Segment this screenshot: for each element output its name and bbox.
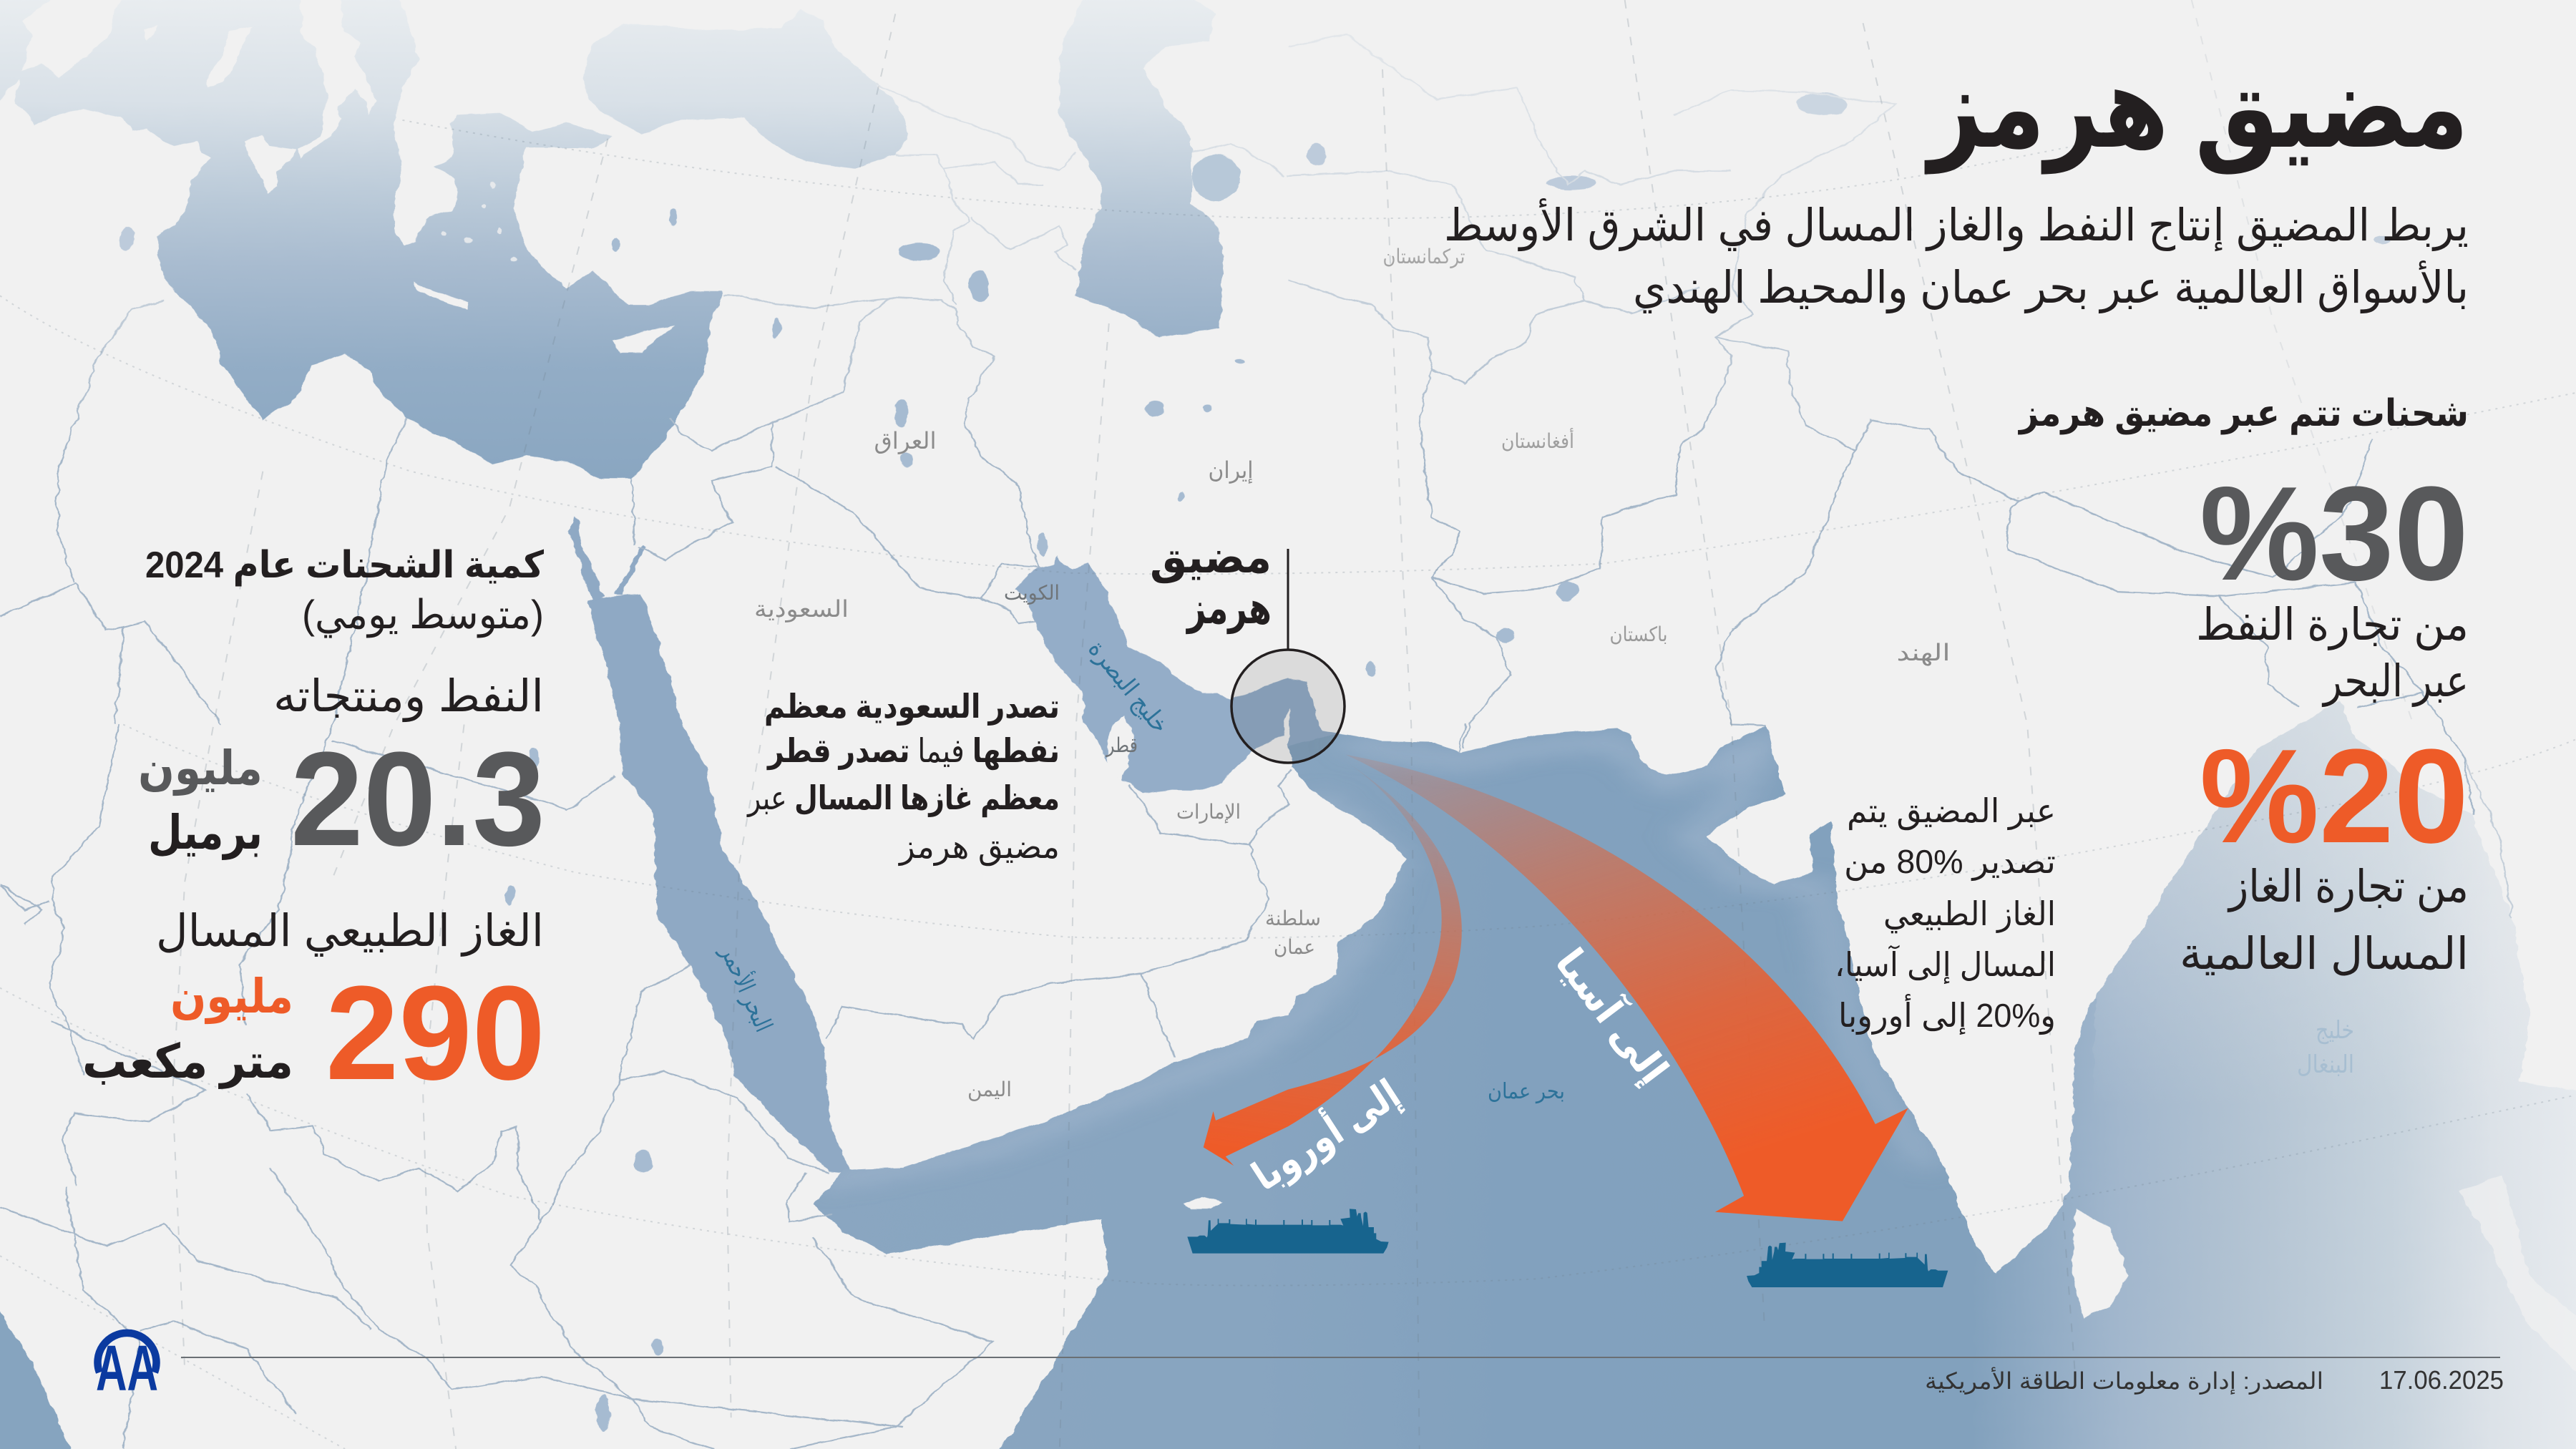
- oil value: برميل: [148, 806, 263, 860]
- sea labels: بحر عمان: [1488, 1080, 1565, 1103]
- source: المصدر: إدارة معلومات الطاقة الأمريكية: [1925, 1367, 2323, 1395]
- oil value: [138, 724, 545, 874]
- subtitle: بالأسواق العالمية عبر بحر عمان والمحيط الهندي: [1633, 260, 2469, 314]
- strait callout: مضيق: [1150, 533, 1272, 583]
- oil value: 20.3: [291, 724, 545, 874]
- sea labels: [714, 635, 2354, 1103]
- subtitle: يربط المضيق إنتاج النفط والغاز المسال في الشرق الأوسط: [1444, 197, 2469, 252]
- stat: LNG share: %20: [2200, 721, 2469, 871]
- country labels: الكويت: [1004, 582, 1060, 605]
- text block: LNG destinations: [1835, 792, 2056, 1035]
- country labels: الهند: [1896, 640, 1951, 666]
- arrow: to Europe: [1204, 761, 1462, 1166]
- icon: LNG tanker to Europe: [1187, 1209, 1389, 1254]
- oil value: مليون: [138, 741, 263, 796]
- heading: [145, 545, 545, 638]
- Indian Ocean west corner: [0, 1312, 82, 1449]
- country labels: اليمن: [967, 1078, 1012, 1101]
- heading: (متوسط يومي): [302, 592, 544, 638]
- country labels: قطر: [1105, 734, 1138, 757]
- title: مضيق هرمز: [1924, 45, 2469, 175]
- text block: LNG destinations: الغاز الطبيعي: [1883, 895, 2056, 934]
- country labels: باكستان: [1610, 623, 1667, 645]
- Black Sea: [583, 9, 907, 169]
- country labels: سلطنة: [1265, 907, 1321, 930]
- LNG value: 290: [326, 958, 545, 1108]
- country labels: عمان: [1274, 936, 1315, 958]
- LNG label: الغاز الطبيعي المسال: [156, 907, 544, 957]
- country labels: السعودية: [754, 596, 849, 623]
- country labels: الإمارات: [1176, 801, 1241, 824]
- Red Sea: [570, 517, 850, 1174]
- Sri Lanka: [2072, 1209, 2129, 1318]
- subtitle: [1444, 197, 2469, 314]
- text block: Saudi and Qatar exports: معظم غازها المسال عبر: [746, 779, 1060, 818]
- footer rule: [181, 1357, 2500, 1358]
- text block: LNG destinations: و%20 إلى أوروبا: [1838, 994, 2056, 1035]
- Mediterranean Sea: [0, 0, 723, 478]
- arrow: to Asia: [1345, 754, 1908, 1221]
- stat: oil share: %30: [2200, 459, 2469, 608]
- LNG value: [82, 958, 545, 1108]
- date: 17.06.2025: [2379, 1365, 2504, 1395]
- Qatar land: [1107, 716, 1133, 781]
- heading: شحنات تتم عبر مضيق هرمز: [2017, 393, 2469, 435]
- sea labels: خليج: [2316, 1017, 2354, 1044]
- country labels: تركمانستان: [1382, 245, 1465, 268]
- LNG value: مليون: [170, 970, 293, 1025]
- strait callout: [1150, 533, 1345, 763]
- heading: كمية الشحنات عام 2024: [145, 545, 545, 587]
- oil share caption: عبر البحر: [2321, 657, 2469, 707]
- LNG share caption: المسال العالمية: [2180, 930, 2469, 979]
- text block: Saudi and Qatar exports: [746, 688, 1060, 867]
- arrow label: to Asia: إلى آسيا: [1546, 939, 1679, 1093]
- Sumatra: [2459, 1176, 2576, 1423]
- icon: LNG tanker to Asia: [1747, 1243, 1948, 1287]
- text block: LNG destinations: تصدير %80 من: [1844, 843, 2056, 882]
- text block: Saudi and Qatar exports: تصدر السعودية معظم: [764, 688, 1060, 726]
- sea labels: البنغال: [2297, 1051, 2354, 1078]
- country labels: العراق: [874, 428, 936, 454]
- text block: LNG destinations: عبر المضيق يتم: [1847, 792, 2056, 831]
- text block: Saudi and Qatar exports: مضيق هرمز: [898, 828, 1060, 867]
- panel: shipments through strait: [2017, 393, 2469, 979]
- oil label: النفط ومنتجاته: [273, 672, 544, 722]
- country labels: إيران: [1208, 457, 1254, 484]
- oil share caption: [2196, 600, 2469, 707]
- oil share caption: من تجارة النفط: [2196, 600, 2469, 650]
- strait callout: هرمز: [1186, 584, 1272, 634]
- sea labels: خليج البصرة: [1083, 635, 1174, 739]
- Socotra: [1183, 1196, 1224, 1210]
- text block: Saudi and Qatar exports: نفطها فيما تصدر قطر: [766, 732, 1060, 770]
- Arabian Sea and Bay of Bengal: [739, 693, 2576, 1449]
- LNG share caption: من تجارة الغاز: [2227, 862, 2469, 912]
- LNG share caption: [2180, 862, 2469, 979]
- logo: AA: [96, 1333, 158, 1405]
- text block: LNG destinations: المسال إلى آسيا،: [1835, 945, 2056, 984]
- logo: AA: AA: [96, 1333, 158, 1405]
- country labels: [754, 245, 1951, 1101]
- arrow label: to Europe: إلى أوروبا: [1242, 1068, 1409, 1200]
- Caspian Sea: [1060, 0, 1224, 337]
- LNG value: متر مكعب: [82, 1035, 293, 1089]
- country labels: أفغانستان: [1501, 427, 1574, 452]
- sea labels: البحر الأحمر: [714, 940, 779, 1036]
- Persian Gulf: [1015, 555, 1347, 794]
- panel: 2024 shipment volumes: [82, 545, 545, 1108]
